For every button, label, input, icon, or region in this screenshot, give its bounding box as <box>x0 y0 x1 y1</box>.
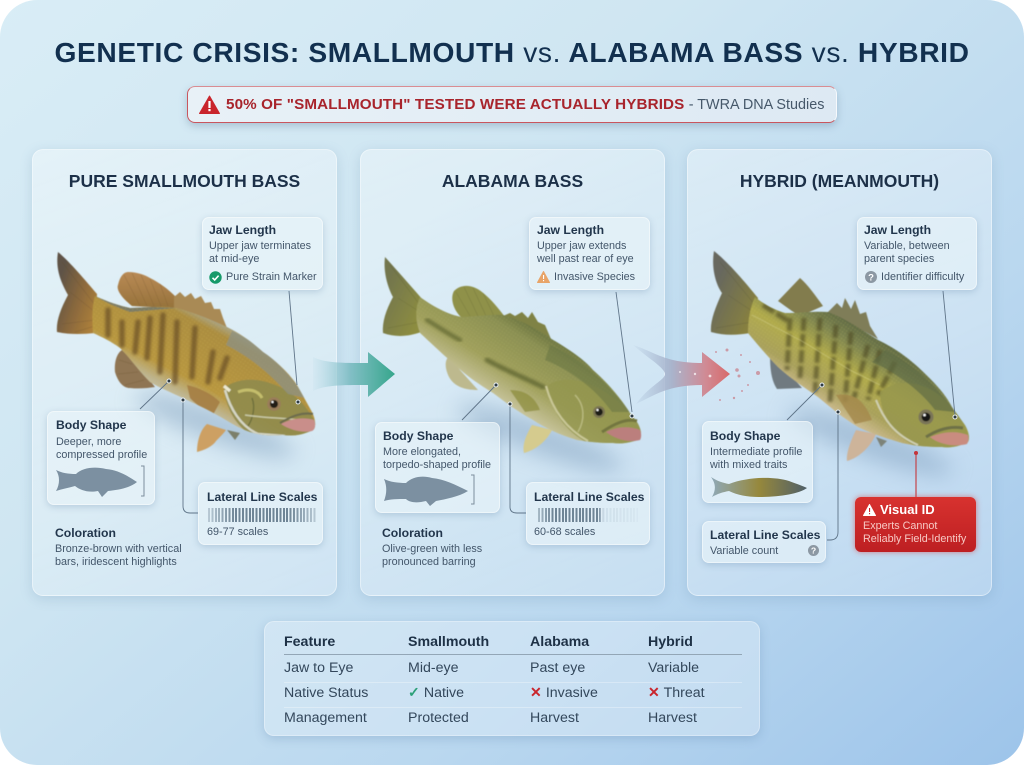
callout: hybrid lateral line scales: Lateral Line Scales <box>710 528 820 542</box>
ventral fin <box>847 430 876 461</box>
callout: visual id warning <box>855 497 976 552</box>
body <box>92 296 315 435</box>
soft dorsal fin <box>452 286 505 318</box>
spiny dorsal fin <box>828 298 878 339</box>
anal fin <box>446 356 478 390</box>
head <box>224 380 316 436</box>
row: jaw to eye: Past eye <box>530 660 585 676</box>
row: jaw to eye: Variable <box>648 660 699 676</box>
fish shadow <box>452 393 628 483</box>
silhouette: mixed body <box>711 477 807 497</box>
panel: pure smallmouth bass: PURE SMALLMOUTH BASS <box>69 171 300 191</box>
icon: orange warning <box>537 271 550 283</box>
text block: smallmouth coloration: bars, iridescent highlights <box>55 556 177 568</box>
silhouette: elongated body <box>384 474 474 506</box>
mouth <box>281 418 315 432</box>
icon: warning triangle <box>199 96 220 114</box>
callout: smallmouth body shape: Body Shape <box>56 418 126 432</box>
comparison table <box>264 621 760 736</box>
text block: alabama coloration: pronounced barring <box>382 556 476 568</box>
row: management: Protected <box>408 710 469 726</box>
eye <box>593 406 605 418</box>
table header: Alabama <box>530 634 589 650</box>
panel: hybrid meanmouth: HYBRID (MEANMOUTH) <box>740 171 939 191</box>
text block: alabama coloration: Olive-green with less <box>382 543 482 555</box>
head <box>548 380 642 445</box>
ventral fin <box>197 424 226 452</box>
callout: hybrid jaw length: Jaw Length <box>864 223 931 237</box>
callout: smallmouth body shape: Deeper, more <box>56 436 121 448</box>
callout: hybrid body shape: Body Shape <box>710 429 780 443</box>
soft dorsal fin <box>778 278 823 316</box>
alert text: 50% OF "SMALLMOUTH" TESTED WERE ACTUALLY HYBRIDS - TWRA DNA Studies <box>226 96 824 113</box>
callout: smallmouth lateral line scales: Lateral Line Scales <box>207 490 317 504</box>
callout: smallmouth body shape: compressed profile <box>56 449 147 461</box>
callout: hybrid lateral line scales <box>702 521 826 563</box>
callout: smallmouth jaw length <box>202 217 323 290</box>
arrow: smallmouth to alabama <box>316 352 395 397</box>
callout: alabama jaw length: well past rear of eye <box>537 253 634 265</box>
row: jaw to eye: Jaw to Eye <box>284 660 353 676</box>
mouth <box>930 432 968 445</box>
row: management: Harvest <box>530 710 579 726</box>
row: management: Management <box>284 710 367 726</box>
callout: visual id warning: Experts Cannot <box>863 520 937 532</box>
alert banner <box>187 86 837 123</box>
callout: hybrid jaw length: parent species <box>864 253 934 265</box>
callout: alabama body shape: Body Shape <box>383 429 453 443</box>
illustration: hybrid meanmouth <box>710 250 970 482</box>
fish shadow <box>782 397 958 487</box>
icon: question mark: ? <box>811 546 816 556</box>
callout: visual id warning: Visual ID <box>880 502 935 517</box>
callout: hybrid lateral line scales: Variable count <box>710 545 778 557</box>
row: native status: ✕ Invasive <box>530 685 598 701</box>
arrow: hybridization streams <box>638 347 760 402</box>
callout: smallmouth jaw length: Upper jaw terminates <box>209 240 311 252</box>
icon: white warning triangle <box>863 504 876 516</box>
callout: alabama lateral line scales <box>526 482 650 545</box>
callout: hybrid body shape: with mixed traits <box>710 459 787 471</box>
callout: smallmouth lateral line scales: 69-77 scales <box>207 526 268 538</box>
callout: alabama body shape <box>375 422 500 513</box>
callout: alabama lateral line scales: Lateral Line Scales <box>534 490 644 504</box>
text block: smallmouth coloration: Coloration <box>55 526 116 540</box>
panel: alabama bass: ALABAMA BASS <box>442 171 583 191</box>
callout: visual id warning: Reliably Field-Identify <box>863 533 966 545</box>
table header <box>284 633 742 655</box>
callout: alabama jaw length <box>529 217 650 290</box>
callout: hybrid jaw length: Variable, between <box>864 240 950 252</box>
text block: smallmouth coloration <box>55 526 182 568</box>
row: management: Harvest <box>648 710 697 726</box>
tail fin <box>711 251 758 335</box>
callout: alabama jaw length: Upper jaw extends <box>537 240 626 252</box>
illustration: alabama bass <box>382 256 642 479</box>
icon: question mark: ? <box>868 272 874 283</box>
row: native status: ✕ Threat <box>648 685 705 701</box>
row: jaw to eye: Mid-eye <box>408 660 458 676</box>
icon: question mark <box>808 545 819 556</box>
head <box>880 383 970 450</box>
eye <box>918 410 934 424</box>
silhouette: deep body <box>56 466 144 497</box>
lateral stripe <box>427 320 460 340</box>
icon: green check <box>209 271 222 284</box>
title: GENETIC CRISIS: SMALLMOUTH vs. ALABAMA BASS vs. HYBRID <box>54 36 970 68</box>
callout: smallmouth jaw length: at mid-eye <box>209 253 259 265</box>
callout: alabama jaw length: Invasive Species <box>554 271 635 283</box>
callout: alabama jaw length: Jaw Length <box>537 223 604 237</box>
panel: pure smallmouth bass <box>32 149 337 596</box>
callout: hybrid jaw length: Identifier difficulty <box>881 271 964 283</box>
callout: alabama lateral line scales: 60-68 scales <box>534 526 595 538</box>
callout: hybrid body shape <box>702 421 813 503</box>
illustration: smallmouth bass <box>56 252 316 466</box>
callout: hybrid jaw length <box>857 217 977 290</box>
tail fin <box>383 257 423 336</box>
fish shadow <box>130 381 300 469</box>
soft dorsal fin <box>118 272 178 310</box>
leader lines <box>140 291 958 540</box>
callout: smallmouth jaw length: Pure Strain Marker <box>226 271 317 283</box>
mouth <box>606 427 641 441</box>
body <box>416 297 641 443</box>
spiny dorsal fin <box>174 292 227 328</box>
vertical bars <box>108 310 227 382</box>
scale count bar <box>538 508 628 522</box>
text block: alabama coloration <box>382 526 482 568</box>
spiny dorsal fin <box>503 312 551 339</box>
table header: Smallmouth <box>408 634 489 650</box>
eye <box>267 397 281 411</box>
anal fin <box>115 350 155 388</box>
table header: Hybrid <box>648 634 693 650</box>
icon: question mark <box>865 271 877 283</box>
panel: alabama bass <box>360 149 665 596</box>
anal fin <box>770 354 802 389</box>
row: native status: ✓ Native <box>408 685 464 701</box>
callout: smallmouth body shape <box>47 411 155 505</box>
panel: hybrid meanmouth <box>687 149 992 596</box>
row: native status <box>284 684 742 708</box>
callout: alabama body shape: More elongated, <box>383 446 461 458</box>
callout: smallmouth jaw length: Jaw Length <box>209 223 276 237</box>
broken bars <box>763 305 895 402</box>
tail fin <box>57 252 97 334</box>
callout: hybrid body shape: Intermediate profile <box>710 446 802 458</box>
body <box>748 297 969 447</box>
text block: alabama coloration: Coloration <box>382 526 443 540</box>
row: jaw to eye <box>284 659 742 683</box>
row: native status: Native Status <box>284 685 368 701</box>
text block: smallmouth coloration: Bronze-brown with vertical <box>55 543 182 555</box>
callout: smallmouth lateral line scales <box>198 482 323 545</box>
scale count bar <box>208 508 316 522</box>
callout: alabama body shape: torpedo-shaped profile <box>383 459 491 471</box>
row: management <box>284 710 697 726</box>
ventral fin <box>523 425 552 453</box>
table header: Feature <box>284 634 335 650</box>
